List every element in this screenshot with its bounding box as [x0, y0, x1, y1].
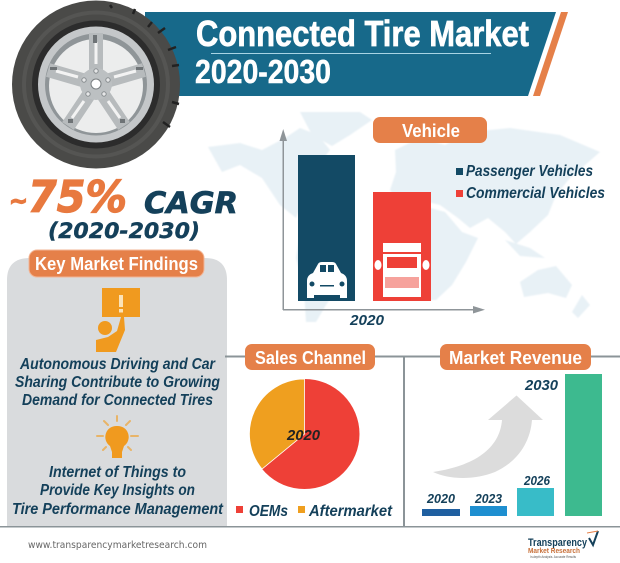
icon: car: [307, 262, 347, 298]
axis label: 2020: 2020: [349, 312, 385, 329]
bar: 2023: 2023: [474, 491, 503, 506]
panel: vehicle chart: [280, 117, 605, 329]
legend: sales channel: [236, 503, 393, 520]
bar: 2030: 2030: [524, 377, 559, 394]
finding 1: Autonomous Driving and Car: [19, 356, 216, 373]
pie chart: [249, 379, 360, 489]
CAGR callout: [9, 172, 238, 243]
bar: 2023: [470, 491, 507, 516]
title: Connected Tire Market: [196, 13, 529, 54]
icon: person holding warning sign: [96, 288, 140, 352]
bar: 2026: [517, 473, 554, 516]
panel: sales channel: [236, 344, 393, 520]
CAGR value: ~: [9, 187, 28, 215]
logo: [528, 531, 598, 559]
bar: commercial vehicles: [373, 192, 431, 301]
finding 2: [12, 464, 224, 518]
legend: sales channel: Aftermarket: [308, 503, 393, 520]
bar: 2020: 2020: [426, 491, 456, 506]
bar: passenger vehicles: [298, 155, 355, 301]
arrow: growth: [433, 396, 543, 478]
CAGR value: 75%: [28, 172, 127, 223]
logo: Market Research: [528, 548, 580, 555]
icon: truck: [374, 243, 430, 297]
panel: key market findings: [7, 250, 227, 526]
CAGR period: (2020-2030): [48, 219, 200, 243]
heading: key market findings: [29, 250, 204, 277]
finding 2: Provide Key Insights on: [40, 482, 195, 499]
heading: sales channel: [245, 344, 375, 370]
legend: vehicle types: [456, 163, 605, 202]
bar: 2026: 2026: [523, 473, 551, 488]
world map background: [208, 112, 600, 322]
title banner: [145, 12, 568, 96]
CAGR label: CAGR: [144, 186, 238, 220]
pie chart: 2020: [286, 427, 321, 444]
chart axes: [280, 129, 485, 314]
finding 2: Tire Performance Management: [12, 501, 224, 518]
logo: In-depth Analysis. Accurate Results: [530, 555, 576, 559]
bar: 2030: [524, 374, 602, 516]
legend: vehicle types: Passenger Vehicles: [466, 163, 593, 180]
heading: market revenue: Market Revenue: [449, 348, 582, 368]
heading: key market findings: Key Market Findings: [35, 254, 198, 274]
legend: sales channel: OEMs: [249, 503, 288, 520]
panel: market revenue: [422, 344, 602, 516]
website url: www.transparencymarketresearch.com: [28, 540, 207, 551]
finding 2: Internet of Things to: [49, 464, 186, 481]
bar: 2020: [422, 491, 460, 516]
heading: vehicle: [373, 117, 487, 143]
heading: sales channel: Sales Channel: [255, 348, 366, 368]
icon: light bulb: [97, 416, 138, 458]
finding 1: Sharing Contribute to Growing: [15, 374, 220, 391]
heading: vehicle: Vehicle: [402, 121, 460, 141]
subtitle: 2020-2030: [195, 53, 331, 90]
finding 1: [15, 356, 220, 409]
icon: tire: [12, 0, 180, 168]
logo: Transparency: [528, 537, 588, 549]
legend: vehicle types: Commercial Vehicles: [466, 185, 605, 202]
finding 1: Demand for Connected Tires: [22, 392, 213, 409]
